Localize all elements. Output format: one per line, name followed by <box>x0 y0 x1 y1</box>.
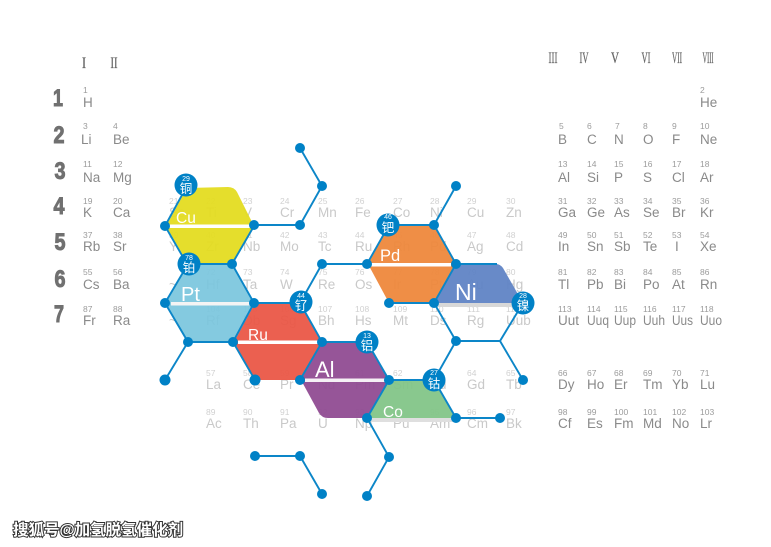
main group elements, right block: As <box>614 205 630 220</box>
transition metals, middle block: Nd <box>318 377 335 392</box>
transition metals, middle block: 112 <box>506 304 520 314</box>
badge: palladium: 46 <box>384 214 392 221</box>
main group elements, right block: 10 <box>700 121 710 131</box>
hexagon: Al: Al <box>315 357 335 382</box>
main group elements, right block: N <box>614 132 624 147</box>
main group elements, right block: 53 <box>672 230 682 240</box>
transition metals, middle block: 95 <box>430 407 440 417</box>
main group elements, right block: 66 <box>558 368 568 378</box>
transition metals, middle block: 79 <box>467 267 477 277</box>
transition metals, middle block: 22 <box>206 196 216 206</box>
badge: nickel: 28 <box>519 293 527 300</box>
transition metals, middle block: Cu <box>467 205 484 220</box>
hexagon: Al <box>301 342 389 418</box>
transition metals, middle block: 24 <box>280 196 290 206</box>
main group elements, left block: 20 <box>113 196 123 206</box>
transition metals, middle block: 107 <box>318 304 332 314</box>
main group elements, left block: Cs <box>83 277 100 292</box>
transition metals, middle block: 45 <box>393 230 403 240</box>
main group elements, right block: 35 <box>672 196 682 206</box>
main group elements, right block: 102 <box>672 407 686 417</box>
badge: nickel: 镍 <box>517 299 529 313</box>
main group elements, right block: S <box>643 170 652 185</box>
main group elements, right block: 103 <box>700 407 714 417</box>
transition metals, middle block: Bk <box>506 416 522 431</box>
main group elements, left block: 56 <box>113 267 123 277</box>
main group elements, right block: Se <box>643 205 660 220</box>
main group elements, left block: Be <box>113 132 130 147</box>
transition metals, middle block: 64 <box>467 368 477 378</box>
transition metals, middle block: 40 <box>206 230 216 240</box>
main group elements, right block: He <box>700 95 717 110</box>
main group elements, left block: 55 <box>83 267 93 277</box>
period numbers: 3 <box>54 158 66 185</box>
main group elements, right block: Sn <box>587 239 604 254</box>
transition metals, middle block: Am <box>430 416 450 431</box>
transition metals, middle block: 91 <box>280 407 290 417</box>
main group elements, left block: H <box>83 95 93 110</box>
transition metals, middle block: Nb <box>243 239 260 254</box>
main group elements, right block: 81 <box>558 267 568 277</box>
trapezoid: Ni: Ni <box>455 279 477 305</box>
trapezoid: Ni <box>435 264 523 307</box>
main group elements, right block: 14 <box>587 159 597 169</box>
group numerals header: II <box>110 55 118 72</box>
main group elements, left block: 11 <box>83 159 92 169</box>
main group elements, right block: Tm <box>643 377 662 392</box>
transition metals, middle block: Rh <box>393 239 410 254</box>
main group elements, right block: 52 <box>643 230 653 240</box>
main group elements, left block: 87 <box>83 304 93 314</box>
transition metals, middle block: Pa <box>280 416 297 431</box>
transition metals, middle block: 74 <box>280 267 290 277</box>
badge: ruthenium: 44 <box>297 293 305 300</box>
main group elements, left block: Fr <box>83 313 96 328</box>
hexagon: Cu <box>166 187 254 264</box>
transition metals, middle block: Sc <box>169 205 185 220</box>
main group elements, right block: 114 <box>587 304 601 314</box>
transition metals, middle block: 41 <box>243 230 253 240</box>
main group elements, right block: 68 <box>614 368 624 378</box>
hexagon: Pt <box>166 264 254 342</box>
badge: aluminium: 13 <box>363 333 371 340</box>
group numerals header <box>82 50 714 72</box>
main group elements, right block: 115 <box>614 304 628 314</box>
group numerals header: VII <box>672 50 682 67</box>
main group elements, right block: 83 <box>614 267 624 277</box>
transition metals, middle block: 96 <box>467 407 477 417</box>
main group elements, right block: 33 <box>614 196 624 206</box>
transition metals, middle block: 23 <box>243 196 253 206</box>
main group elements, right block: Xe <box>700 239 717 254</box>
transition metals, middle block: 73 <box>243 267 253 277</box>
main group elements, right block: Ho <box>587 377 604 392</box>
transition metals, middle block: Mn <box>318 205 337 220</box>
transition metals, middle block: Mt <box>393 313 408 328</box>
main group elements, right block: No <box>672 416 689 431</box>
transition metals, middle block: Uub <box>506 313 531 328</box>
watermark: 搜狐号@加氢脱氢催化剂 <box>13 520 183 539</box>
transition metals, middle block: 48 <box>506 230 516 240</box>
main group elements, left block: 1 <box>83 85 88 95</box>
period numbers: 7 <box>54 301 64 328</box>
main group elements, right block: 70 <box>672 368 682 378</box>
transition metals, middle block: Db <box>243 313 260 328</box>
main group elements, right block: 69 <box>643 368 653 378</box>
main group elements, right block: Po <box>643 277 660 292</box>
main group elements, left block <box>81 85 132 328</box>
transition metals, middle block: Mo <box>280 239 299 254</box>
transition metals, middle block: Pt <box>430 277 443 292</box>
main group elements, right block: Lr <box>700 416 713 431</box>
transition metals, middle block: 104 <box>206 304 220 314</box>
main group elements, left block: 19 <box>83 196 93 206</box>
transition metals, middle block: Au <box>467 277 484 292</box>
main group elements, right block: 98 <box>558 407 568 417</box>
badge: platinum: 78 <box>185 255 193 262</box>
main group elements, left block: 3 <box>83 121 88 131</box>
main group elements, right block: At <box>672 277 685 292</box>
main group elements, left block: 38 <box>113 230 123 240</box>
main group elements, right block: Ne <box>700 132 717 147</box>
transition metals, middle block: Bh <box>318 313 335 328</box>
main group elements, right block: 118 <box>700 304 714 314</box>
transition metals, middle block: Hs <box>355 313 372 328</box>
transition metals, middle block: 58 <box>243 368 253 378</box>
transition metals, middle block: Ni <box>430 205 443 220</box>
transition metals, middle block: 77 <box>393 267 403 277</box>
main group elements, right block: Ge <box>587 205 605 220</box>
transition metals, middle block: 90 <box>243 407 253 417</box>
transition metals, middle block: 94 <box>393 407 403 417</box>
transition metals, middle block: 80 <box>506 267 516 277</box>
main group elements, right block: Br <box>672 205 686 220</box>
transition metals, middle block: Sg <box>280 313 297 328</box>
main group elements, right block: 6 <box>587 121 592 131</box>
transition metals, middle block: 76 <box>355 267 365 277</box>
main group elements, left block: Mg <box>113 170 132 185</box>
transition metals, middle block: Hf <box>206 277 220 292</box>
main group elements, right block: Ga <box>558 205 577 220</box>
transition metals, middle block: Sm <box>393 377 413 392</box>
main group elements, right block: 84 <box>643 267 653 277</box>
transition metals, middle block: Re <box>318 277 335 292</box>
transition metals, middle block: Ti <box>206 205 217 220</box>
main group elements, right block: 9 <box>672 121 677 131</box>
main group elements, right block: Kr <box>700 205 714 220</box>
main group elements, right block: 116 <box>643 304 657 314</box>
transition metals, middle block: 109 <box>393 304 407 314</box>
main group elements, right block: Es <box>587 416 603 431</box>
transition metals, middle block: Tb <box>506 377 522 392</box>
badge: platinum: 铂 <box>183 260 195 275</box>
transition metals, middle block: Pd <box>430 239 447 254</box>
connector nodes <box>160 143 528 501</box>
transition metals, middle block: Fe <box>355 205 371 220</box>
group numerals header: III <box>548 50 558 67</box>
badge: cobalt: 27 <box>430 370 438 377</box>
main group elements, right block: F <box>672 132 680 147</box>
transition metals, middle block: 43 <box>318 230 328 240</box>
main group elements, right block: 50 <box>587 230 597 240</box>
main group elements, right block: Md <box>643 416 662 431</box>
main group elements, right block: Uuh <box>643 313 665 328</box>
main group elements, right block: 67 <box>587 368 597 378</box>
connector network <box>165 148 523 496</box>
badge: copper: 铜 <box>180 181 192 196</box>
main group elements, right block: Uuo <box>700 313 722 328</box>
main group elements, left block: Rb <box>83 239 100 254</box>
main group elements, right block: B <box>558 132 567 147</box>
transition metals, middle block: 97 <box>506 407 516 417</box>
transition metals, middle block: Cm <box>467 416 488 431</box>
transition metals, middle block: Tc <box>318 239 332 254</box>
badge: aluminium <box>356 330 378 354</box>
transition metals, middle block: Th <box>243 416 259 431</box>
main group elements, right block: 8 <box>643 121 648 131</box>
hexagon: Pd <box>368 225 456 303</box>
group numerals header: VI <box>642 50 650 67</box>
main group elements, right block: Si <box>587 170 599 185</box>
badge: palladium: 钯 <box>382 221 395 235</box>
transition metals, middle block: Pu <box>393 416 410 431</box>
period numbers: 4 <box>54 193 65 220</box>
transition metals, middle block: 39 <box>169 230 179 240</box>
main group elements, right block: O <box>643 132 654 147</box>
transition metals, middle block: U <box>318 416 328 431</box>
badge: cobalt: 钴 <box>428 376 440 391</box>
main group elements, right block: 7 <box>615 121 620 131</box>
main group elements, right block: 100 <box>614 407 628 417</box>
main group elements, right block: Yb <box>672 377 689 392</box>
main group elements, right block: 117 <box>672 304 686 314</box>
transition metals, middle block: Ce <box>243 377 260 392</box>
transition metals, middle block: 44 <box>355 230 365 240</box>
main group elements, right block: I <box>675 239 679 254</box>
main group elements, right block: 2 <box>700 85 705 95</box>
hexagon: Ru: Ru <box>248 327 268 344</box>
main group elements, right block: C <box>587 132 597 147</box>
main group elements, right block: Pb <box>587 277 604 292</box>
transition metals, middle block: V <box>243 205 252 220</box>
badge: copper <box>174 174 198 196</box>
transition metals, middle block: 25 <box>318 196 328 206</box>
main group elements, right block: 71 <box>700 368 710 378</box>
transition metals, middle block: Gd <box>467 377 485 392</box>
main group elements, left block: Ra <box>113 313 131 328</box>
main group elements, right block: P <box>614 170 623 185</box>
transition metals, middle block: 72 <box>206 267 216 277</box>
transition metals, middle block: Zr <box>206 239 219 254</box>
period numbers: 2 <box>54 122 64 149</box>
badge: palladium <box>376 214 400 236</box>
transition metals, middle block: 92 <box>318 407 328 417</box>
transition metals, middle block: Os <box>355 277 373 292</box>
trapezoid: Co <box>368 380 456 422</box>
transition metals, middle block: 110 <box>430 304 444 314</box>
period numbers: 6 <box>54 266 66 293</box>
main group elements, left block: Li <box>81 132 92 147</box>
transition metals, middle block: Cd <box>506 239 523 254</box>
transition metals, middle block: Pm <box>355 377 375 392</box>
transition metals, middle block: 29 <box>467 196 477 206</box>
badge: aluminium: 铝 <box>361 338 373 353</box>
transition metals, middle block: Ag <box>467 239 484 254</box>
main group elements, right block: Er <box>614 377 628 392</box>
main group elements, right block: 15 <box>614 159 624 169</box>
transition metals, middle block: Rg <box>467 313 484 328</box>
main group elements, right block: 51 <box>614 230 624 240</box>
transition metals, middle block: Np <box>355 416 372 431</box>
transition metals, middle block: 89 <box>206 407 216 417</box>
transition metals, middle block: Ac <box>206 416 222 431</box>
transition metals, middle block: 65 <box>506 368 516 378</box>
transition metals, middle block: 28 <box>430 196 440 206</box>
transition metals, middle block: 57 <box>206 368 216 378</box>
transition metals, middle block: 30 <box>506 196 516 206</box>
main group elements, right block: Cl <box>672 170 685 185</box>
badge: copper: 29 <box>182 176 190 183</box>
main group elements, right block: 85 <box>672 267 682 277</box>
transition metals, middle block: 46 <box>430 230 440 240</box>
main group elements, right block: 82 <box>587 267 597 277</box>
hexagon: Pt: Pt <box>181 284 200 306</box>
transition metals, middle block: 111 <box>467 304 480 314</box>
main group elements, right block: Te <box>643 239 657 254</box>
transition metals, middle block: La <box>206 377 222 392</box>
transition metals, middle block: Pr <box>280 377 294 392</box>
main group elements, left block: 88 <box>113 304 123 314</box>
transition metals, middle block: 108 <box>355 304 369 314</box>
main group elements, right block: 36 <box>700 196 710 206</box>
hexagon: Cu: Cu <box>176 210 196 227</box>
transition metals, middle block: 75 <box>318 267 328 277</box>
main group elements, right block: 34 <box>643 196 653 206</box>
main group elements, right block: 113 <box>558 304 572 314</box>
main group elements, right block: In <box>558 239 569 254</box>
main group elements, right block: Rn <box>700 277 717 292</box>
transition metals, middle block: 27 <box>393 196 403 206</box>
transition metals, middle block: 93 <box>355 407 365 417</box>
transition metals, middle block: ~ <box>169 277 177 292</box>
transition metals, middle block: 62 <box>393 368 403 378</box>
main group elements, left block: 12 <box>113 159 123 169</box>
main group elements, right block: Bi <box>614 277 626 292</box>
main group elements, right block: Dy <box>558 377 575 392</box>
main group elements, right block: 5 <box>559 121 564 131</box>
badge: platinum <box>178 252 200 276</box>
period numbers: 5 <box>54 229 66 256</box>
transition metals, middle block: 59 <box>280 368 290 378</box>
transition metals, middle block: Rf <box>206 313 220 328</box>
main group elements, right block: Uup <box>614 313 636 328</box>
transition metals, middle block: Hg <box>506 277 523 292</box>
main group elements, right block: Fm <box>614 416 634 431</box>
main group elements, right block: Tl <box>558 277 569 292</box>
group numerals header: I <box>82 55 86 72</box>
period numbers <box>53 85 66 328</box>
main group elements, right block: 18 <box>700 159 710 169</box>
main group elements, right block <box>558 85 722 431</box>
transition metals, middle block: 106 <box>280 304 294 314</box>
hexagon: Ru <box>234 303 322 380</box>
badge: nickel <box>512 292 534 314</box>
badge: ruthenium: 钌 <box>295 299 307 313</box>
transition metals, middle block: 105 <box>243 304 257 314</box>
transition metals, middle block: 61 <box>355 368 365 378</box>
transition metals, middle block: Ru <box>355 239 372 254</box>
main group elements, right block: Sb <box>614 239 631 254</box>
main group elements, right block: 16 <box>643 159 653 169</box>
main group elements, right block: 101 <box>643 407 657 417</box>
transition metals, middle block: 60 <box>318 368 328 378</box>
main group elements, right block: Uus <box>672 313 693 328</box>
transition metals, middle block: W <box>280 277 293 292</box>
trapezoid: Co: Co <box>383 404 403 421</box>
transition metals, middle block: Ds <box>430 313 447 328</box>
main group elements, right block: 32 <box>587 196 597 206</box>
badge: ruthenium <box>290 290 312 314</box>
main group elements, right block: 54 <box>700 230 710 240</box>
transition metals, middle block: 26 <box>355 196 365 206</box>
main group elements, right block: 99 <box>587 407 597 417</box>
main group elements, left block: Sr <box>113 239 127 254</box>
main group elements, right block: Cf <box>558 416 572 431</box>
transition metals, middle block: 63 <box>430 368 440 378</box>
transition metals, middle block: Eu <box>430 377 447 392</box>
transition metals, middle block: Cr <box>280 205 295 220</box>
transition metals, middle block: Co <box>393 205 410 220</box>
main group elements, left block: 4 <box>113 121 118 131</box>
period numbers: 1 <box>53 85 63 112</box>
main group elements, right block: 31 <box>558 196 568 206</box>
transition metals, middle block: 78 <box>430 267 440 277</box>
transition metals, middle block: Zn <box>506 205 522 220</box>
main group elements, left block: K <box>83 205 92 220</box>
transition metals, middle block: Ta <box>243 277 258 292</box>
main group elements, left block: 37 <box>83 230 93 240</box>
periodic table infographic: VIII <box>702 50 714 67</box>
transition metals, middle block: 47 <box>467 230 477 240</box>
main group elements, right block: 86 <box>700 267 710 277</box>
main group elements, right block: Uut <box>558 313 579 328</box>
transition metals, middle block <box>169 196 531 431</box>
badge: cobalt <box>422 368 446 392</box>
main group elements, right block: Uuq <box>587 313 609 328</box>
main group elements, right block: 13 <box>558 159 568 169</box>
main group elements, right block: Lu <box>700 377 715 392</box>
main group elements, right block: Ar <box>700 170 714 185</box>
group numerals header: IV <box>580 50 589 67</box>
transition metals, middle block: Y <box>169 239 178 254</box>
hexagon: Pd: Pd <box>380 247 400 265</box>
main group elements, left block: Ba <box>113 277 130 292</box>
main group elements, right block: 17 <box>672 159 682 169</box>
transition metals, middle block: 21 <box>169 196 179 206</box>
main group elements, left block: Ca <box>113 205 131 220</box>
transition metals, middle block: Ir <box>393 277 402 292</box>
main group elements, right block: 49 <box>558 230 568 240</box>
group numerals header: V <box>611 50 619 67</box>
transition metals, middle block: 42 <box>280 230 290 240</box>
main group elements, right block: Al <box>558 170 570 185</box>
main group elements, left block: Na <box>83 170 101 185</box>
transition metals, middle block: ~ <box>169 313 177 328</box>
